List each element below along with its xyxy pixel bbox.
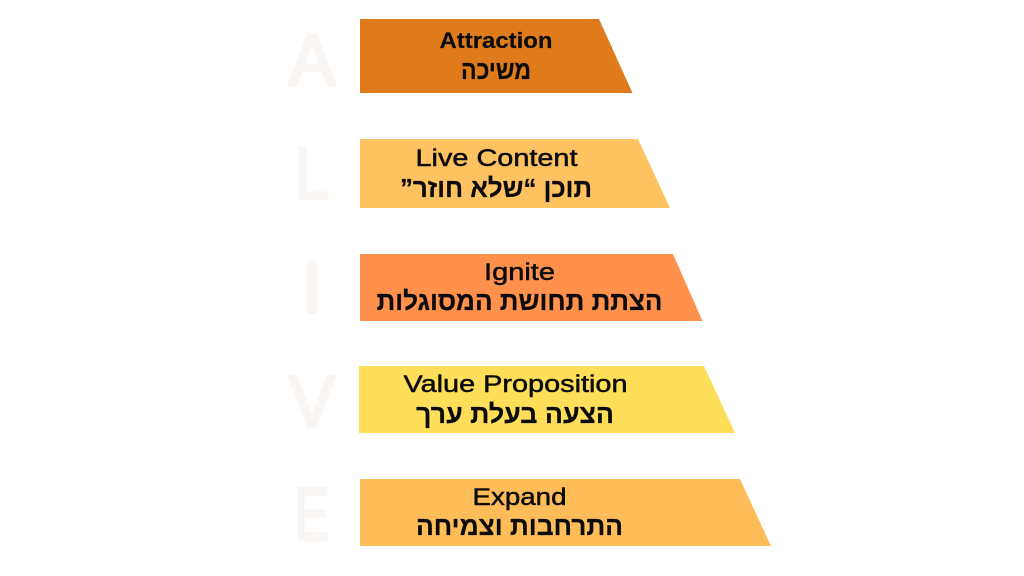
letter A: A <box>289 20 335 102</box>
panel: Expand <box>360 479 771 546</box>
letter E: E <box>294 474 330 555</box>
letter L: L <box>296 134 328 214</box>
heading: Expand: Expand <box>472 484 566 511</box>
heading: Live Content: Live Content <box>416 145 578 172</box>
letter V: V <box>289 362 335 442</box>
text: Ignite Hebrew: הצתת תחושת המסוגלות <box>376 286 662 316</box>
panel: Ignite <box>360 254 702 321</box>
text: Expand Hebrew: התרחבות וצמיחה <box>416 511 623 541</box>
heading: Value Proposition: Value Proposition <box>404 371 628 398</box>
text: Live Content Hebrew: תוכן “שלא חוזר” <box>400 173 592 203</box>
letter I: I <box>302 248 322 328</box>
panel: Live Content <box>360 139 670 208</box>
panel: Attraction <box>360 19 632 93</box>
text: Attraction Hebrew: משיכה <box>461 55 531 85</box>
text: Value Proposition Hebrew: הצעה בעלת ערך <box>416 399 614 429</box>
panel: Value Proposition <box>359 366 735 433</box>
heading: Attraction: Attraction <box>440 28 552 53</box>
heading: Ignite: Ignite <box>484 259 555 286</box>
